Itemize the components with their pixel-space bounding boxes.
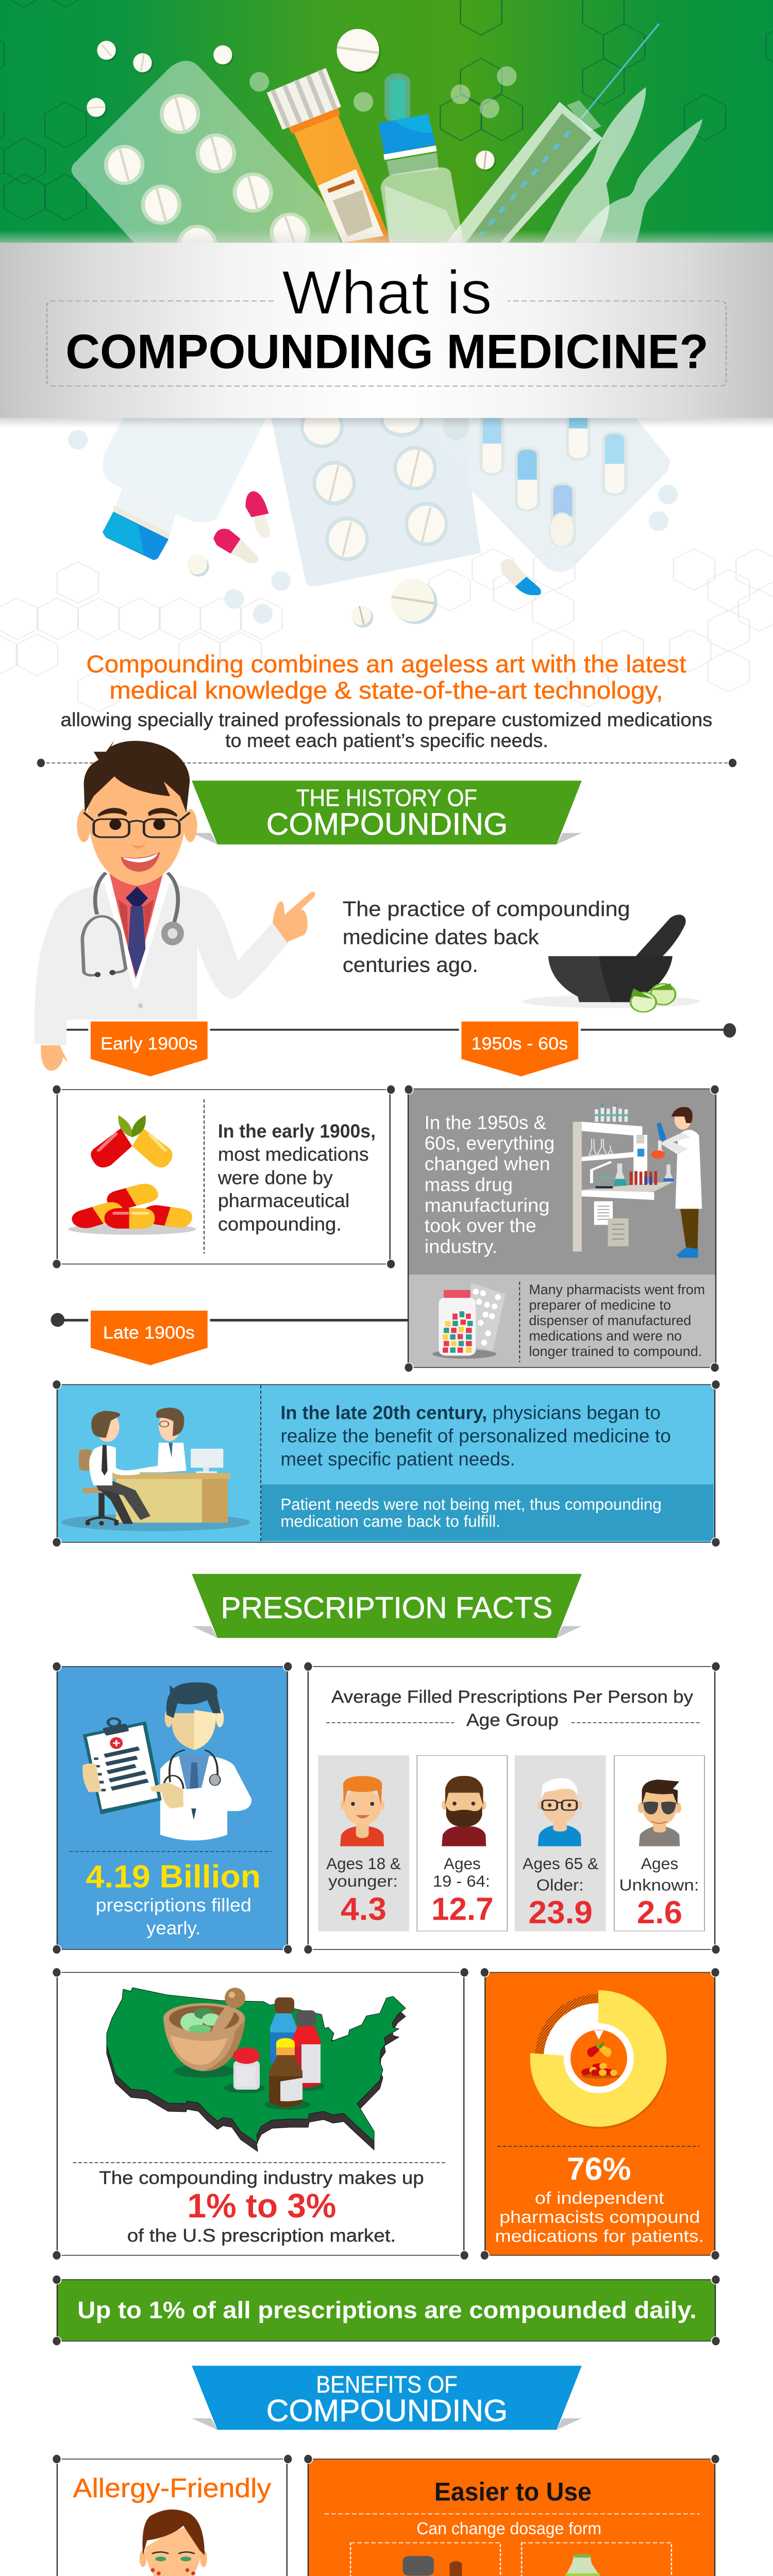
dashed divider [37,758,737,768]
age card: unknown [614,1756,704,1931]
stat: 4.19 billion: prescriptions filled [96,1895,251,1916]
panel: easier to use: Easier to Use [434,2478,592,2506]
age card: 65 and older: Ages 65 & [523,1854,598,1873]
section ribbon: benefits of compounding [192,2366,582,2430]
illustration: USA map with medicines [107,1988,406,2151]
age card: 65 and older: 23.9 [529,1894,593,1930]
age card: unknown: Ages [641,1854,678,1873]
syringe [446,24,659,243]
blue and white capsules [480,408,628,547]
age card: 19 to 64: 19 - 64: [433,1872,490,1890]
text block: early 1900s: most medications [218,1143,369,1165]
section: intro and history heading [0,479,773,1071]
stat: 76 percent: of independent [535,2189,664,2207]
timeline tag: early 1900s [88,1020,210,1078]
icon: medicine bottle and dropper [395,2556,463,2576]
text block: patient needs [280,1495,662,1531]
hexagon pattern on green [0,0,773,220]
text block: early 1900s: In the early 1900s, [218,1120,376,1142]
timeline tag: early 1900s: Early 1900s [100,1033,198,1054]
stat: 76 percent [495,2150,704,2245]
text block: patient needs: medication came back to fulfill. [280,1512,500,1531]
title band shadow [0,418,773,428]
text block: late 20th century: meet specific patient needs. [280,1448,515,1469]
section: prescription facts [52,1574,720,2260]
stat: 76 percent: medications for patients. [495,2227,704,2245]
intro statement [61,650,712,751]
pale blister packs below title [68,418,678,586]
text block: 1950s: manufacturing [425,1194,550,1216]
card: liquid form [350,2543,500,2576]
timeline tag: 1950s - 60s: 1950s - 60s [472,1033,568,1054]
icon: capsule pile [68,1181,196,1235]
age card: 65 and older: Older: [536,1876,584,1894]
age card: 19 to 64: Ages [444,1854,481,1873]
stat: 1 to 3 percent: of the U.S prescription market. [127,2226,396,2246]
text block: 1950s: 60s, everything [425,1132,554,1154]
text block: early 1900s: were done by [217,1167,333,1188]
chart: 76 percent donut [530,1990,668,2129]
text block: 1950s: took over the [425,1215,536,1236]
stat: 4.19 billion: yearly. [146,1918,200,1938]
illustration: patient with rash [119,2510,228,2576]
stat: 4.19 billion [86,1858,261,1938]
section ribbon: prescription facts [192,1574,582,1638]
stat: 76 percent: 76% [567,2150,631,2187]
history statement [343,897,630,977]
section ribbon: benefits of compounding: BENEFITS OF [316,2371,458,2398]
section: compounding share and benefits [52,2146,720,2576]
section ribbon: the history of compounding: COMPOUNDING [266,807,508,841]
age card: 18 and younger [318,1755,409,1931]
green header background [0,0,773,243]
panel: easier to use: Can change dosage form [416,2519,601,2538]
text block: 1950s: changed when [425,1153,550,1175]
stat: 1 to 3 percent: The compounding industry makes up [99,2168,424,2188]
text block: pharmacists [529,1282,705,1359]
section: hero header [0,0,773,586]
fallen bottle cap and capsules [103,479,574,595]
history statement: centuries ago. [343,953,478,977]
intro statement: to meet each patient’s specific needs. [225,730,548,751]
text block: pharmacists: preparer of medicine to [529,1298,671,1313]
age card: unknown: Unknown: [619,1876,699,1894]
chart title [326,1687,699,1730]
text block: 1950s: mass drug [425,1174,513,1195]
history statement: The practice of compounding [343,897,630,921]
pale blister tablets [300,404,469,561]
illustration: doctor and patient at desk [61,1408,250,1531]
blister pack [72,61,340,265]
illustration: pill jar and blister [432,1283,506,1359]
stat: 1 to 3 percent: 1% to 3% [188,2187,336,2225]
age card: 18 and younger: 4.3 [341,1891,386,1927]
timeline top line [65,1023,736,1038]
text block: 1950s: industry. [425,1235,497,1257]
text block: late 20th century [280,1402,671,1469]
illustration: doctor with clipboard [82,1682,251,1840]
hexagon pattern on white [0,549,773,711]
icon: mortar and pestle [523,914,700,1012]
text block: 1950s: In the 1950s & [425,1112,546,1133]
title: What is [282,259,492,327]
banner: daily prescriptions [52,2275,720,2346]
panel: industry share frame [52,1968,469,2260]
text block: early 1900s [217,1120,376,1234]
text block: pharmacists: dispenser of manufactured [529,1313,691,1328]
header bottom shading [0,230,773,243]
text block: late 20th century: physicians began to [493,1402,661,1423]
section ribbon: prescription facts: PRESCRIPTION FACTS [221,1590,552,1624]
panel: prescriptions by age group [304,1662,720,1954]
text block: pharmacists: medications and were no [529,1329,682,1344]
panel: 4.19 billion [52,1662,292,1954]
title band [0,243,773,418]
history statement: medicine dates back [343,925,539,949]
timeline tag: late 1900s [51,1309,408,1367]
icon: medicine drops [91,1115,173,1167]
text block: early 1900s: compounding. [218,1213,342,1234]
timeline tag: late 1900s: Late 1900s [103,1323,195,1343]
title [65,259,709,379]
age card: 19 to 64: 12.7 [431,1891,494,1927]
age card: 19 to 64 [417,1756,507,1931]
illustration: lab scientist [573,1104,702,1258]
section ribbon: benefits of compounding: COMPOUNDING [266,2394,508,2428]
age card: 18 and younger: Ages 18 & [326,1854,401,1873]
stat: 4.19 billion: 4.19 Billion [86,1858,261,1894]
panel: 76 percent frame [480,1968,720,2260]
panel: late 20th century [52,1380,720,1547]
scattered tablets [188,555,438,628]
age card: 65 and older [515,1755,606,1931]
panel: allergy-friendly: Allergy-Friendly [73,2473,272,2503]
stat: 76 percent: pharmacists compound [499,2208,700,2226]
icon: gel bottle and cream jar [565,2554,636,2576]
dropper bottle [379,73,463,243]
panel: 1950s to 60s [404,1085,719,1372]
doctor character [35,740,315,1071]
loose white pills [87,29,517,171]
age card: unknown: 2.6 [637,1894,682,1930]
text block: 1950s [425,1112,554,1257]
section: history timeline panels [51,1020,720,1547]
timeline tag: 1950s - 60s [459,1020,581,1078]
panel: allergy-friendly [52,2454,292,2576]
age card: 18 and younger: younger: [328,1872,398,1890]
glass ampoules [542,87,702,243]
card: topical form [522,2543,671,2576]
title dashed frame [47,301,726,386]
stat: 1 to 3 percent [99,2168,424,2246]
panel: early 1900s [52,1085,395,1268]
chart title: Age Group [466,1710,559,1730]
orange pill bottle [267,68,392,243]
section ribbon: the history of compounding: THE HISTORY OF [296,785,477,811]
text block: late 20th century: In the late 20th century, [280,1402,487,1423]
text block: early 1900s: pharmaceutical [218,1190,349,1211]
section ribbon: the history of compounding [192,781,582,844]
panel: easier to use [304,2454,720,2576]
